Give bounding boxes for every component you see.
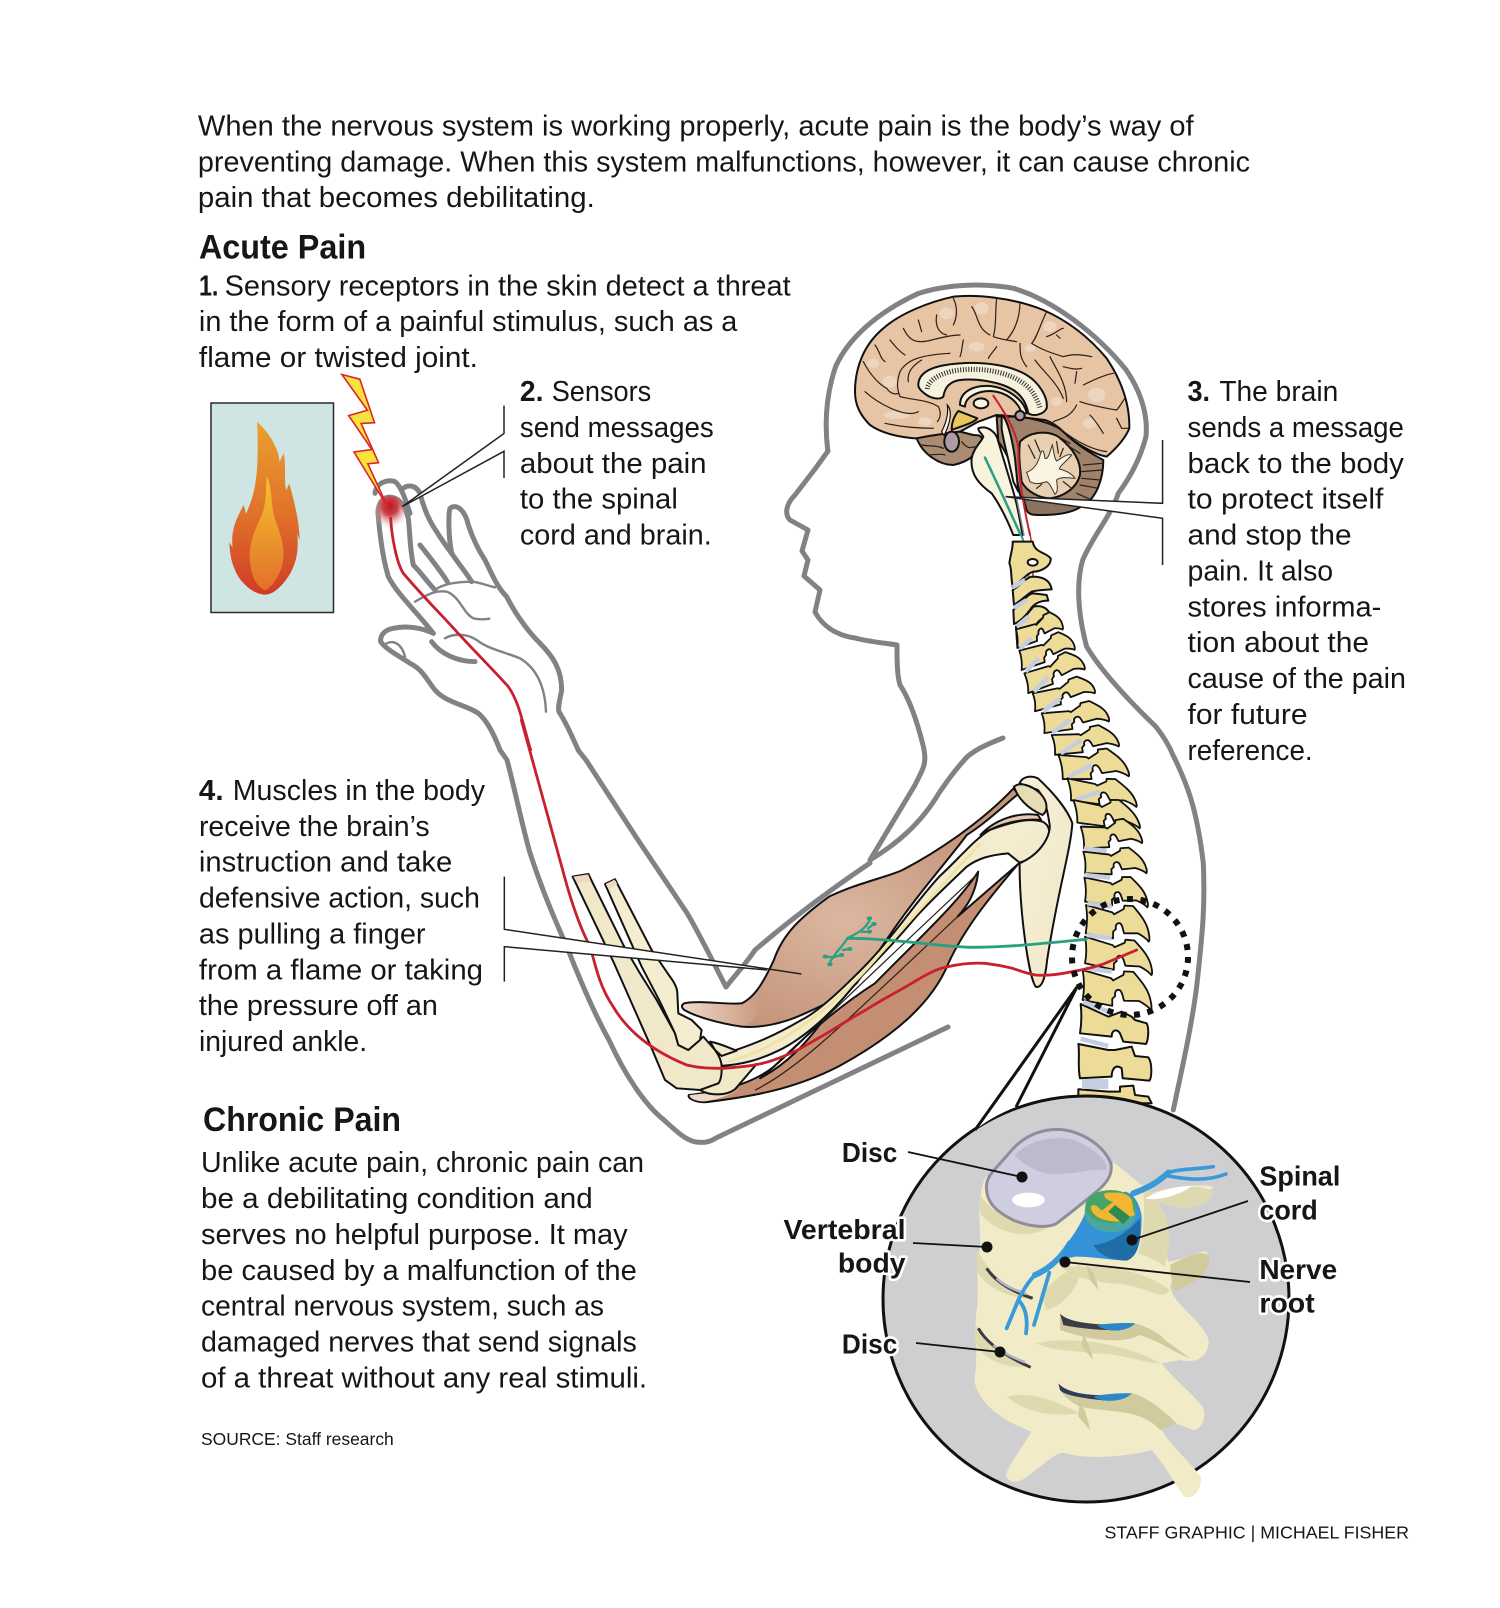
- step 3 text: pain. It also: [1188, 555, 1333, 587]
- pituitary: [944, 432, 959, 452]
- figure: spine: [1009, 530, 1152, 1103]
- inset background: [883, 1096, 1289, 1502]
- step 4 text: the pressure off an: [199, 990, 438, 1022]
- brainstem strip: [1002, 415, 1018, 492]
- fornix: [960, 386, 1027, 413]
- icon: lightning bolt: [342, 375, 387, 507]
- humerus highlight: [728, 843, 981, 1062]
- step 3 text: and stop the: [1188, 520, 1352, 552]
- step 3 text: The brain: [1219, 376, 1338, 408]
- step 2 text: Sensors: [552, 376, 651, 408]
- intro text: pain that becomes debilitating.: [198, 182, 595, 214]
- label: lower disc: Disc: [842, 1329, 897, 1360]
- label: nerve root: root: [1259, 1288, 1315, 1319]
- dotted circle: spine detail marker: [1072, 899, 1188, 1015]
- step 4 text: [199, 775, 486, 1058]
- step 2 text: send messages: [520, 412, 714, 444]
- figure: flame panel: [211, 403, 334, 612]
- icon: pain glow at fingertip: [375, 496, 405, 530]
- panel background: [211, 403, 334, 612]
- label: spinal cord: cord: [1259, 1194, 1318, 1225]
- step 1 text: 1.: [199, 270, 218, 302]
- step 2 text: [520, 376, 714, 552]
- biceps muscle: [682, 788, 1018, 1027]
- upper arm and inner forearm outline: [578, 750, 870, 987]
- label: spinal cord: [1259, 1160, 1340, 1225]
- intro text: When the nervous system is working properly, acute pain is the body’s way of: [198, 110, 1195, 142]
- chronic pain text: central nervous system, such as: [201, 1291, 604, 1323]
- cerebrum highlights: [867, 302, 1105, 429]
- head and back outline: [826, 285, 1204, 1110]
- pointer: disc: [908, 1152, 1028, 1182]
- lower disc stripes: [1081, 848, 1112, 1046]
- nerve lines in brain: [985, 396, 1030, 535]
- lower muscle pale tendon end: [690, 1090, 737, 1101]
- nerve endings dots: [823, 916, 877, 966]
- heading: chronic pain: Chronic Pain: [203, 1101, 401, 1139]
- chronic pain text: be caused by a malfunction of the: [201, 1255, 637, 1287]
- step 2 text: about the pain: [520, 448, 707, 480]
- step 3 text: sends a message: [1188, 412, 1404, 444]
- step 4 text: from a flame or taking: [199, 954, 483, 986]
- step 4 text: injured ankle.: [199, 1026, 367, 1058]
- step 4 text: as pulling a finger: [199, 918, 426, 950]
- hypothalamus gland: [952, 411, 977, 430]
- outer arm outline: [500, 750, 948, 1142]
- face and chest outline: [787, 451, 925, 860]
- icon: flame: [229, 422, 300, 595]
- cord centre: [1108, 1205, 1130, 1224]
- label: vertebral body: Vertebral: [783, 1214, 906, 1245]
- step 3 text: for future: [1188, 699, 1308, 731]
- brainstem: [971, 427, 1023, 535]
- intro text: preventing damage. When this system malfunctions, however, it can cause chronic: [198, 146, 1250, 178]
- all text: [198, 110, 1409, 1542]
- biceps pale tendon end: [682, 991, 761, 1027]
- canal gaps: [1060, 1313, 1135, 1330]
- lower vertebrae: [1073, 799, 1152, 1103]
- disc slits: [987, 1268, 1033, 1298]
- label: nerve root: Nerve: [1259, 1254, 1337, 1285]
- intro text: [198, 110, 1250, 214]
- humerus bone: [714, 820, 1049, 1066]
- callout wedge: step 4 pointer: [504, 877, 801, 982]
- disc highlight: [1012, 1193, 1045, 1207]
- pointer: nerve root: [1060, 1256, 1250, 1282]
- white stalk: [942, 405, 950, 436]
- label: disc: Disc: [842, 1137, 897, 1168]
- lower lobe folds: [922, 442, 975, 455]
- acromion: [1014, 784, 1047, 815]
- source note: SOURCE: Staff research: [201, 1429, 394, 1449]
- figure: brain: [855, 296, 1129, 535]
- step 4 text: 4.: [199, 775, 224, 807]
- inset circle: vertebrae close-up: [883, 987, 1289, 1502]
- foramen opening: [1145, 1186, 1192, 1199]
- figure: arm muscles: [682, 777, 1072, 1102]
- step 3 text: 3.: [1188, 376, 1210, 408]
- label: spinal cord: Spinal: [1259, 1160, 1340, 1191]
- chronic pain text: [201, 1147, 647, 1395]
- green nerve: response from spine to muscle: [823, 916, 1086, 966]
- cerebrum: [855, 296, 1129, 457]
- cord green matter: [1085, 1190, 1136, 1223]
- step 3 text: [1188, 376, 1406, 767]
- label: nerve root: [1259, 1254, 1337, 1319]
- step 2 text: 2.: [520, 376, 544, 408]
- chronic pain text: serves no helpful purpose. It may: [201, 1219, 628, 1251]
- cord teal ring: [1085, 1191, 1137, 1232]
- step 3 text: reference.: [1188, 735, 1313, 767]
- top disc: [986, 1129, 1111, 1226]
- pointer tail edges: [975, 987, 1077, 1130]
- upper disc stripes: [1013, 580, 1105, 825]
- step 1 text: [199, 270, 791, 374]
- figure: hand outline: [375, 481, 578, 750]
- step 2 text: cord and brain.: [520, 520, 712, 552]
- chronic pain text: be a debilitating condition and: [201, 1183, 593, 1215]
- radius head: [710, 1042, 737, 1056]
- pale bone tips: [573, 874, 617, 889]
- step 1 text: Sensory receptors in the skin detect a threat: [225, 270, 791, 302]
- step 4 text: receive the brain’s: [199, 811, 430, 843]
- figure: body silhouette: [500, 285, 1204, 1142]
- vertebra column silhouette: [974, 1163, 1213, 1497]
- label: vertebral body: body: [838, 1248, 906, 1279]
- chronic pain text: Unlike acute pain, chronic pain can: [201, 1147, 644, 1179]
- step 3 text: stores informa-: [1188, 591, 1381, 623]
- lower arm muscle: [689, 864, 1018, 1102]
- step 1 text: flame or twisted joint.: [199, 342, 478, 374]
- humerus tendon: [981, 814, 1041, 835]
- step 4 text: Muscles in the body: [233, 775, 486, 807]
- lower cerebellum lobe: [1023, 498, 1083, 515]
- nerve roots: [1007, 1167, 1226, 1333]
- credit: STAFF GRAPHIC | MICHAEL FISHER: [1104, 1522, 1409, 1542]
- cord sheath: [1064, 1192, 1142, 1261]
- disc upper tint: [1015, 1138, 1107, 1174]
- step 3 text: back to the body: [1188, 448, 1405, 480]
- pointer: lower disc: [916, 1343, 1006, 1358]
- bone A: [573, 874, 722, 1090]
- biceps outline: [682, 788, 1018, 1027]
- pons and lower lobe: [917, 432, 983, 465]
- step 2 text: to the spinal: [520, 484, 678, 516]
- cerebellum white matter: [1027, 445, 1075, 494]
- white gap beside humerus: [760, 1022, 822, 1078]
- pineal swirl: [1015, 411, 1025, 420]
- callout wedge: step 2 pointer: [402, 406, 504, 507]
- figure: forearm bones and elbow: [573, 874, 757, 1094]
- lower arm bone: [700, 1064, 757, 1094]
- upper vertebrae: [1009, 542, 1137, 825]
- folia striations: [1028, 437, 1102, 500]
- vertebrae shading and detail: [975, 1183, 1213, 1430]
- cord sheath shading: [1093, 1218, 1140, 1261]
- step 1 text: in the form of a painful stimulus, such as a: [199, 306, 737, 338]
- cerebellum tree: [1019, 433, 1080, 498]
- midbrain and cerebellum surround: [997, 417, 1103, 515]
- step 3 text: to protect itself: [1188, 484, 1384, 516]
- nerve lines through neck: [1029, 530, 1033, 613]
- pointer: vertebral body: [913, 1242, 992, 1252]
- corpus callosum: [918, 363, 1047, 415]
- muscle separation line: [756, 873, 978, 1090]
- callosum striations: [927, 369, 1040, 408]
- bone B: [605, 879, 702, 1050]
- callout wedge: step 3 pointer: [1006, 440, 1163, 565]
- step 4 text: defensive action, such: [199, 883, 480, 915]
- chronic pain text: of a threat without any real stimuli.: [201, 1363, 647, 1395]
- scapula: [1020, 777, 1072, 987]
- cerebrum sulci: [863, 298, 1128, 452]
- thalamus: [974, 398, 988, 408]
- butterfly grey matter: [1091, 1193, 1135, 1222]
- spinal cord and nerve roots: [1007, 1167, 1226, 1333]
- label: vertebral body: [783, 1214, 906, 1279]
- pointer: spinal cord: [1126, 1201, 1248, 1246]
- pointer tail: [975, 987, 1077, 1130]
- step 3 text: cause of the pain: [1188, 663, 1406, 695]
- step 4 text: instruction and take: [199, 847, 452, 879]
- heading: acute pain: Acute Pain: [199, 228, 366, 266]
- step 3 text: tion about the: [1188, 627, 1369, 659]
- shoulder outline: [870, 738, 1003, 860]
- red nerve: pain signal from finger to spine: [391, 518, 1137, 1068]
- chronic pain text: damaged nerves that send signals: [201, 1327, 637, 1359]
